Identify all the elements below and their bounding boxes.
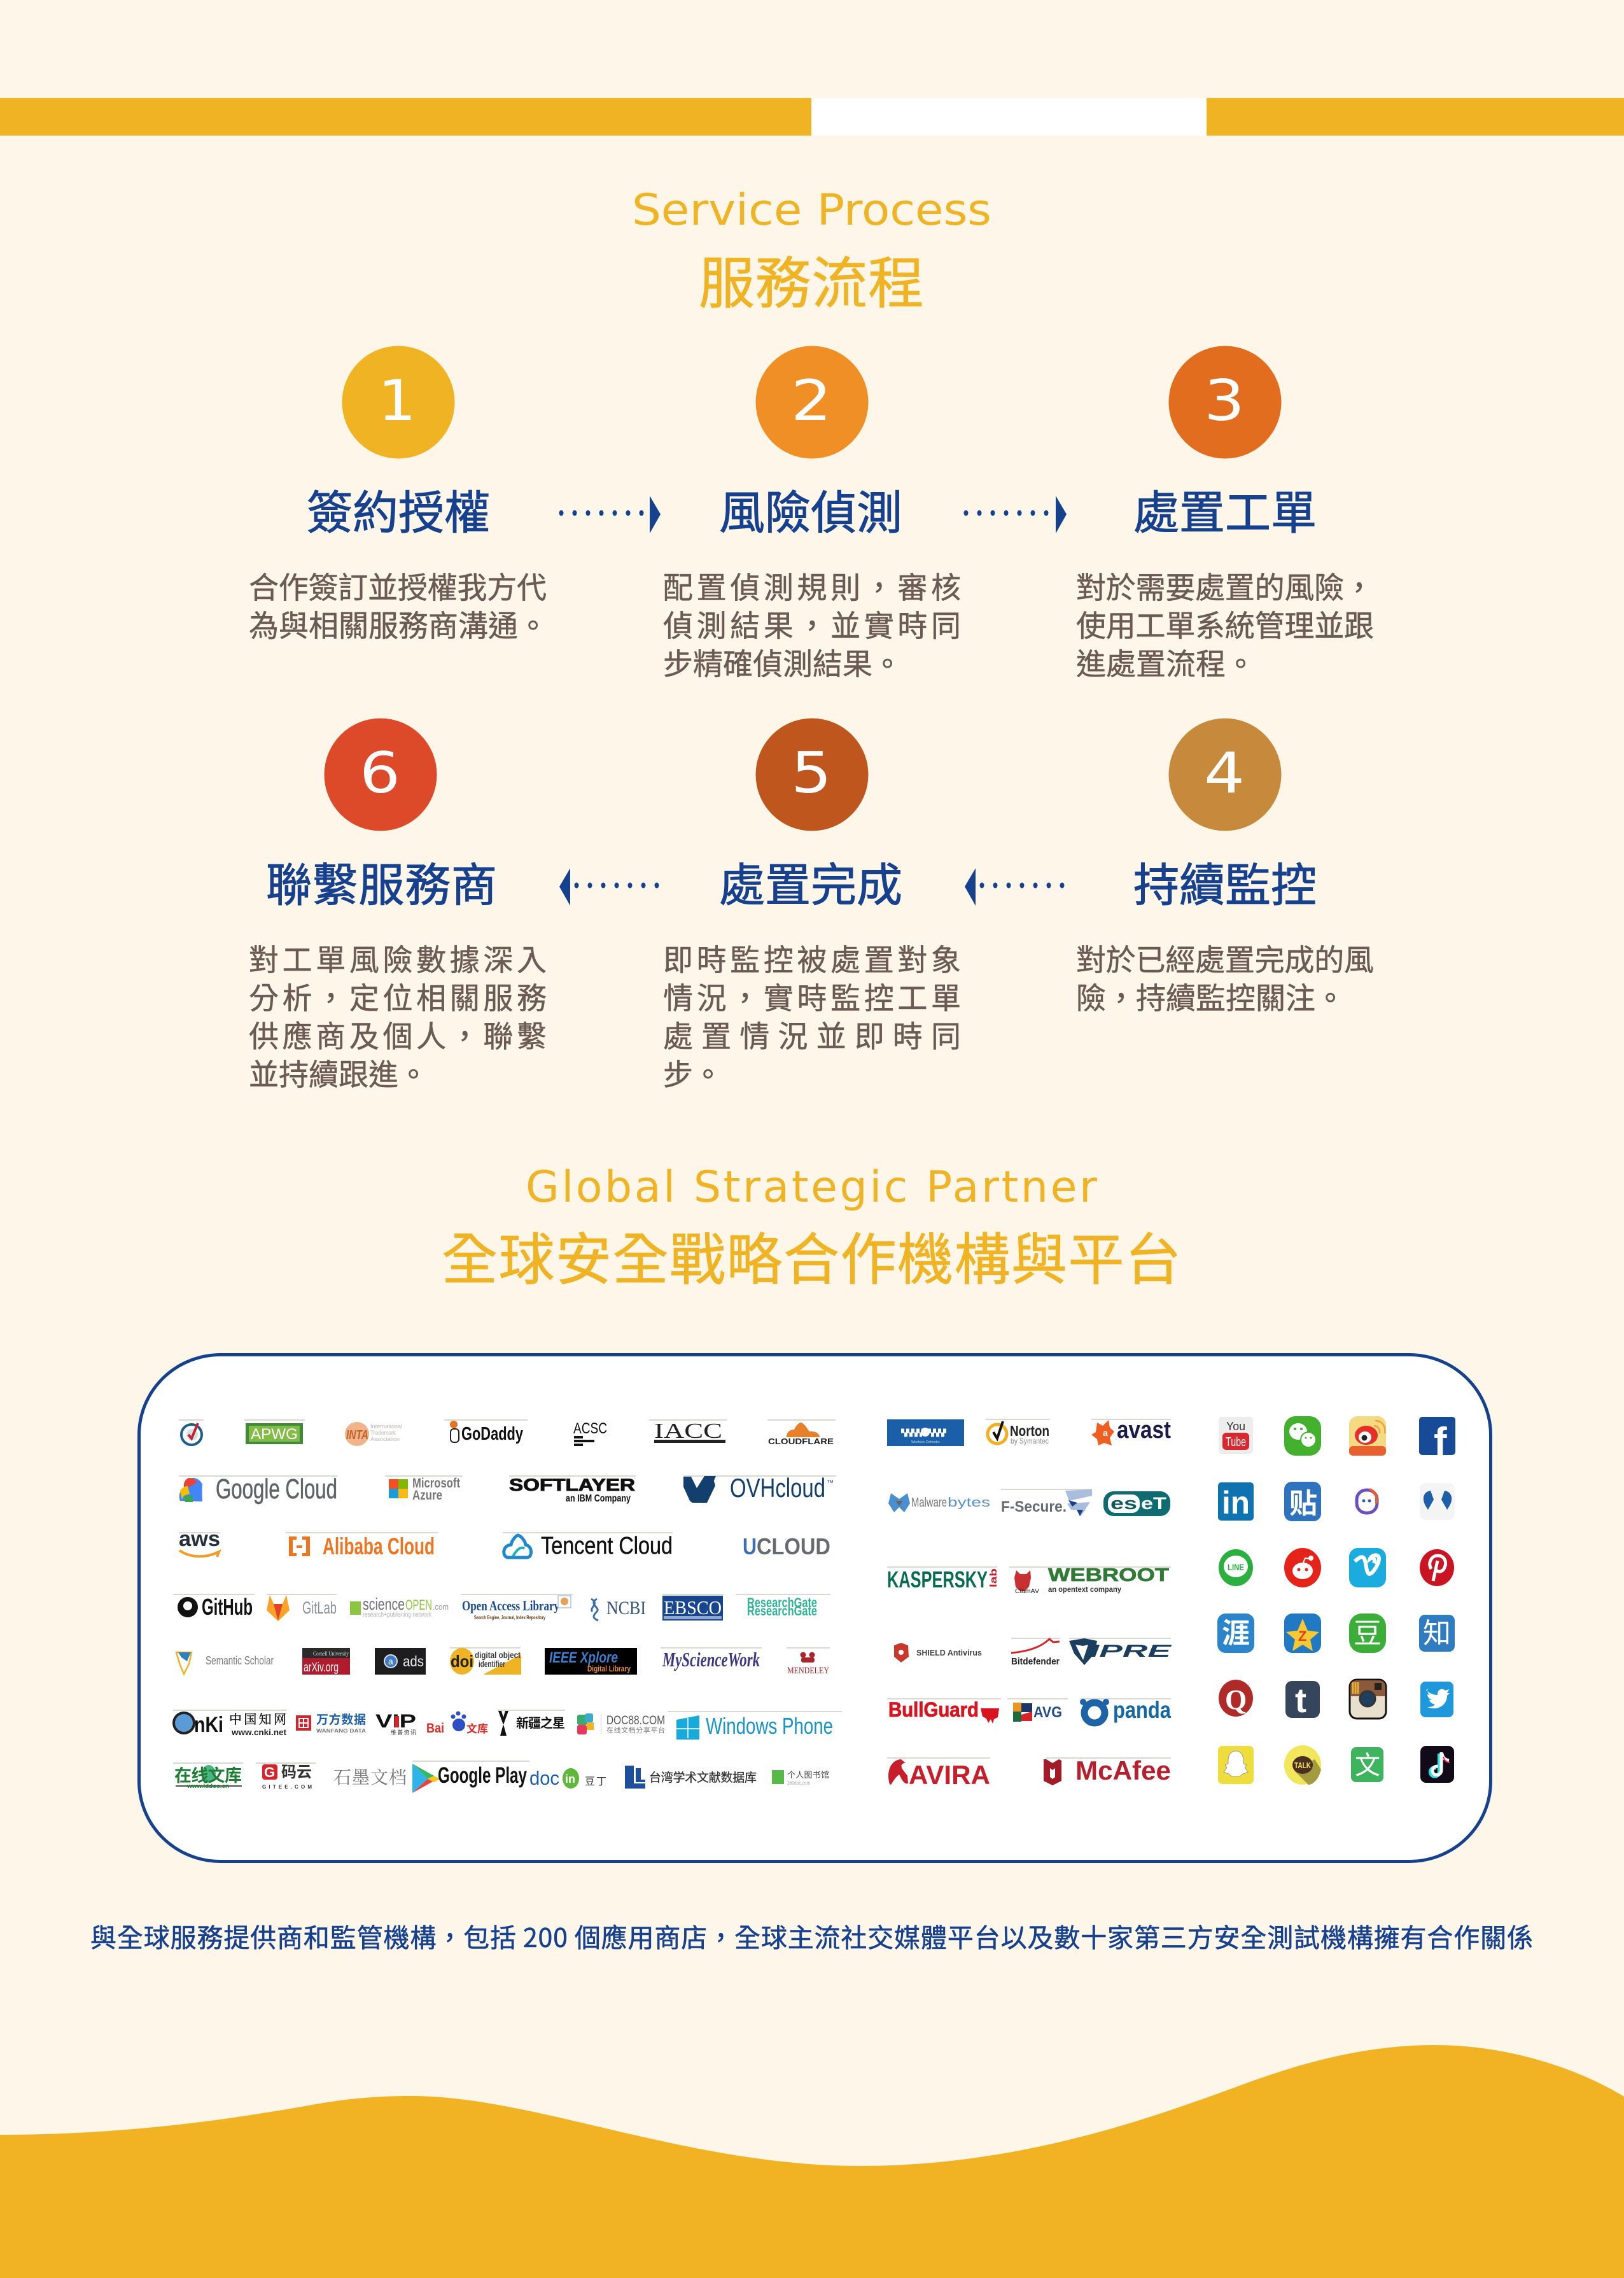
- step 4: 險，持續監控關注。: [1076, 974, 1345, 1018]
- logo: 在线文库: www.lddoc.cn: [186, 1783, 229, 1789]
- logo: IEEE Xplore: IEEE Xplore: [549, 1649, 618, 1666]
- icon: YouTube: Tube: [1226, 1435, 1246, 1449]
- logo: IEEE Xplore: [545, 1648, 637, 1675]
- logo: ClamAV and Webroot: WEBROOT: [1048, 1565, 1169, 1585]
- logo: Gitee 码云: [262, 1759, 312, 1790]
- icon: Quora: Q: [1225, 1684, 1247, 1715]
- top colour bar: [0, 98, 1624, 136]
- logo: CNKI: nKi: [194, 1713, 223, 1737]
- step 1: [249, 346, 548, 645]
- logo: Cloudflare: CLOUDFLARE: [768, 1437, 834, 1446]
- logo: ClamAV and Webroot: [1014, 1565, 1169, 1595]
- icon: TikTok: [1420, 1746, 1454, 1783]
- step 1: 合作簽訂並授權我方代: [249, 563, 547, 607]
- logo: Kaspersky: lab: [988, 1568, 999, 1587]
- logo: scienceOpen: .com: [433, 1602, 449, 1612]
- step 6: 並持續跟進。: [249, 1050, 428, 1094]
- arrow: step 4 to 5: [965, 868, 1064, 906]
- icon: KakaoTalk: TALK: [1294, 1761, 1311, 1770]
- logo: ADS: [375, 1648, 426, 1675]
- logo: Kaspersky: KASPERSKY: [887, 1566, 988, 1592]
- icon: KakaoTalk: [1284, 1745, 1321, 1785]
- step 2: 步精確偵測結果。: [663, 640, 902, 684]
- logo: Norton: Norton: [1010, 1423, 1049, 1439]
- logo: 石墨文档: 石墨文档: [333, 1768, 407, 1788]
- icon: Quora: [1219, 1680, 1253, 1717]
- footer text: 與全球服務提供商和監管機構，包括 200 個應用商店，全球主流社交媒體平台以及數十家第三方安全測試機構擁有合作關係: [90, 1916, 1533, 1955]
- logo: GitLab: [267, 1595, 337, 1621]
- logo: ICANN: [181, 1423, 202, 1445]
- logo: 新疆之星: 新疆之星: [516, 1713, 565, 1731]
- heading: Global Strategic Partner: 全球安全戰略合作機構與平台: [442, 1215, 1181, 1296]
- logo: VIPRE: [1069, 1638, 1173, 1665]
- logo: Google Cloud: [179, 1473, 337, 1505]
- icon: 豆瓣: 豆: [1354, 1610, 1382, 1651]
- logo: SHIELD Antivirus: SHIELD Antivirus: [916, 1648, 982, 1657]
- logo: avast: avast: [1117, 1417, 1171, 1444]
- logo: Gitee 码云: GITEE.COM: [262, 1784, 312, 1790]
- icon: Tumblr: t: [1295, 1682, 1306, 1720]
- logo: ClamAV and Webroot: an opentext company: [1048, 1585, 1121, 1594]
- logo: Baidu Wenku: [426, 1711, 488, 1736]
- logo: NCBI: [591, 1598, 646, 1621]
- logo: SoftLayer: [509, 1475, 635, 1504]
- step 6: 分析，定位相關服務: [249, 974, 547, 1018]
- step 5: 即時監控被處置對象: [663, 936, 961, 980]
- logo: CNKI: www.cnki.net: [231, 1727, 287, 1737]
- logo: SoftLayer: SOFTLAYER: [509, 1475, 635, 1494]
- heading: Service Process: 服務流程: [699, 239, 924, 320]
- step 5: 處置情況並即時同: [663, 1012, 961, 1056]
- icon: Instagram: [1350, 1680, 1386, 1719]
- logo: OVHcloud: OVHcloud: [730, 1473, 825, 1503]
- heading: Global Strategic Partner: Global Strategic Partner: [526, 1162, 1097, 1213]
- step 4: 4: [1204, 740, 1245, 806]
- logo: UCloud: CLOUD: [757, 1533, 830, 1559]
- logo: Google Cloud: Google Cloud: [216, 1473, 337, 1505]
- logo: Mendeley: [787, 1652, 829, 1676]
- logo: DOC88: DOC88.COM: [606, 1714, 665, 1727]
- logo: panda: panda: [1113, 1697, 1171, 1723]
- logo: Open Access Library: [462, 1596, 571, 1621]
- logo: VIP: [375, 1711, 416, 1736]
- step 3: 對於需要處置的風險，: [1076, 563, 1374, 607]
- logo: Wanfang Data: [296, 1710, 366, 1734]
- icon: 知乎: 知: [1423, 1610, 1451, 1651]
- logo: SoftLayer: an IBM Company: [566, 1493, 631, 1504]
- logo: ACSC: ACSC: [573, 1420, 607, 1437]
- logo: McAfee: McAfee: [1075, 1755, 1171, 1785]
- icon: Reddit: [1284, 1548, 1321, 1587]
- logo: VIP: 维普资讯: [391, 1728, 416, 1736]
- step 3: 使用工單系統管理並跟: [1076, 601, 1374, 645]
- logo: avast: [1091, 1417, 1171, 1445]
- logo: Gitee 码云: 码云: [281, 1759, 312, 1782]
- step 1: 為與相關服務商溝通。: [249, 601, 548, 645]
- logo: scienceOpen: science: [363, 1594, 405, 1614]
- logo: 台湾学术文献数据库: 台湾学术文献数据库: [649, 1768, 757, 1785]
- logo: APWG: [246, 1423, 303, 1444]
- logo: Tencent Cloud: Tencent Cloud: [541, 1533, 673, 1559]
- logo: Tencent Cloud: [504, 1533, 673, 1559]
- logo: ESET: eT: [1141, 1494, 1167, 1513]
- step 6: 6: [360, 740, 400, 806]
- logo: doc.in 豆丁: [529, 1767, 606, 1789]
- logo: DOI: digital object: [475, 1650, 521, 1660]
- icon: blue symbol app: [1420, 1483, 1455, 1520]
- logo: CNKI: 中国知网: [229, 1712, 286, 1727]
- logo: GitHub: GitHub: [202, 1594, 253, 1620]
- heading: Service Process: Service Process: [632, 185, 991, 236]
- logo: 新疆之星: [498, 1711, 565, 1736]
- logo: BullGuard: BullGuard: [888, 1698, 979, 1721]
- logo: VIPRE: IPRE: [1089, 1641, 1173, 1661]
- logo: DOI: doi: [451, 1652, 473, 1671]
- logo: CNKI: [174, 1712, 287, 1737]
- icon: Tumblr: [1285, 1681, 1320, 1720]
- logo: ClamAV and Webroot: ClamAV: [1015, 1588, 1039, 1595]
- icon: Twitter: [1420, 1682, 1453, 1717]
- logo: doc.in 豆丁: doc: [529, 1767, 559, 1789]
- arrow: step 1 to 2: [559, 496, 661, 533]
- logo: INTA: International: [370, 1423, 402, 1430]
- icon: LINE: LINE: [1228, 1562, 1244, 1572]
- icon: Facebook: f: [1434, 1420, 1447, 1464]
- logo: IACC: IACC: [654, 1419, 722, 1443]
- logo: Semantic Scholar: Semantic Scholar: [206, 1654, 274, 1667]
- step 6: 對工單風險數據深入: [249, 936, 547, 980]
- step 3: 3: [1204, 368, 1245, 433]
- logo: F-Secure: F-Secure.: [1001, 1498, 1067, 1515]
- icon: star Z: Z: [1298, 1628, 1306, 1644]
- step 6: [249, 718, 547, 1094]
- logo: Wanfang Data: 万方数据: [316, 1710, 366, 1727]
- icon: YouTube: [1219, 1417, 1253, 1454]
- arrow: step 5 to 6: [559, 868, 659, 906]
- logo: AVG: AVG: [1033, 1704, 1062, 1721]
- logo: INTA: [345, 1422, 402, 1446]
- logo: arXiv: [302, 1648, 350, 1675]
- logo: Microsoft Azure: Azure: [412, 1488, 442, 1503]
- step 5: 步。: [663, 1050, 723, 1094]
- step 4: 持續監控: [1133, 848, 1317, 915]
- logo: ResearchGate: ResearchGate: [747, 1596, 817, 1610]
- step 6: 聯繫服務商: [266, 848, 497, 915]
- heading: Global Strategic Partner: [442, 1162, 1181, 1296]
- logo: DOC88: [577, 1713, 665, 1735]
- icon: Pinterest: [1420, 1549, 1454, 1586]
- logo: EBSCO: EBSCO: [664, 1596, 722, 1619]
- step 1: 簽約授權: [307, 475, 490, 542]
- icon: chat bubble: [1357, 1489, 1377, 1513]
- logo: DOC88: 在线文档分享平台: [606, 1725, 665, 1735]
- logo: APWG: APWG: [251, 1426, 298, 1443]
- footer wave: [0, 2045, 1624, 2278]
- logo: GoDaddy: GoDaddy: [461, 1424, 523, 1444]
- logo: 台湾学术文献数据库: [625, 1766, 757, 1789]
- logo: Wanfang Data: WANFANG DATA: [316, 1728, 366, 1734]
- logo: ResearchGate: ResearchGate: [747, 1604, 817, 1619]
- icon: star Z: [1284, 1614, 1321, 1653]
- icon: LINE: [1219, 1549, 1253, 1586]
- logo: GitLab: GitLab: [302, 1598, 337, 1617]
- logo: Microsoft Azure: Microsoft: [412, 1476, 460, 1491]
- logo: Windows Defender: Windows Defender: [911, 1440, 940, 1444]
- panel: partner logos: [139, 1354, 1490, 1861]
- logo: INTA: INTA: [346, 1428, 368, 1442]
- step 1: 1: [378, 368, 416, 433]
- logo: doc.in 豆丁: 豆丁: [585, 1773, 606, 1788]
- logo: ACSC: [573, 1420, 607, 1446]
- icon: 贴吧: 贴: [1289, 1480, 1317, 1521]
- logo: Microsoft Azure: [389, 1476, 460, 1503]
- icon: 百度翻译: 文: [1355, 1745, 1380, 1782]
- logo: aws: aws: [179, 1527, 220, 1551]
- logo: 在线文库: 在线文库: [174, 1762, 242, 1787]
- logo: arXiv: arXiv.org: [304, 1661, 339, 1675]
- logo: VIP: VIP: [375, 1711, 416, 1732]
- step 6: 供應商及個人，聯繫: [249, 1012, 547, 1056]
- logo: Gitee 码云: G: [264, 1764, 275, 1780]
- logo: Bitdefender: [1011, 1639, 1060, 1667]
- step 2: 偵測結果，並實時同: [663, 601, 961, 645]
- step 2: 2: [791, 368, 832, 433]
- icon: Snapchat: [1218, 1746, 1254, 1784]
- step 3: 處置工單: [1133, 475, 1317, 542]
- logo: Windows Phone: [676, 1713, 833, 1740]
- logo: GoDaddy: [450, 1421, 523, 1444]
- logo: scienceOpen: research+publishing network: [363, 1611, 431, 1619]
- logo: DOI: identifier: [479, 1659, 505, 1669]
- step 5: [663, 718, 961, 1094]
- step 5: 5: [791, 740, 832, 806]
- logo: Baidu Wenku: Bai: [426, 1721, 444, 1736]
- logo: Alibaba Cloud: Alibaba Cloud: [323, 1533, 435, 1559]
- step 2: [663, 346, 961, 684]
- logo: Google Play: Google Play: [438, 1763, 527, 1788]
- logo: INTA: Trademark: [370, 1430, 396, 1436]
- heading: Service Process: [632, 185, 991, 320]
- logo: Semantic Scholar: [176, 1652, 274, 1674]
- logo: Norton: by Symantec: [1011, 1437, 1049, 1445]
- logo: MyScienceWork: MyScienceWork: [662, 1648, 760, 1671]
- step 3: 進處置流程。: [1076, 640, 1256, 684]
- icon: 涯: 涯: [1222, 1610, 1250, 1651]
- logo: 个人图书馆 360doc: 360doc.com: [787, 1780, 810, 1786]
- logo: SHIELD Antivirus: [894, 1643, 982, 1663]
- logo: Cloudflare: [768, 1423, 834, 1446]
- logo: INTA: Association: [370, 1436, 400, 1442]
- logo: Open Access Library: Search Engine, Journal, Index Repository: [474, 1615, 545, 1621]
- logo: doc.in 豆丁: in: [565, 1773, 575, 1785]
- logo: NCBI: NCBI: [606, 1598, 646, 1619]
- logo: ADS: ads: [403, 1653, 424, 1670]
- logo: F-Secure: [1001, 1489, 1092, 1516]
- logo: Avira: AVIRA: [909, 1760, 990, 1790]
- icon: Weibo: [1349, 1416, 1386, 1456]
- icon: LinkedIn: in: [1222, 1485, 1250, 1521]
- logo: Windows Phone: Windows Phone: [706, 1713, 833, 1739]
- logo: Google Play: [412, 1763, 527, 1793]
- step 5: 情況，實時監控工單: [663, 974, 961, 1018]
- logo: Open Access Library: Open Access Library: [462, 1598, 559, 1614]
- step 4: [1076, 718, 1374, 1018]
- logo: arXiv: Cornell University: [313, 1650, 349, 1657]
- logo: panda: [1080, 1697, 1171, 1723]
- logo: Bitdefender: Bitdefender: [1011, 1656, 1060, 1667]
- icon: WeChat: [1284, 1416, 1321, 1456]
- logo: Baidu Wenku: 文库: [466, 1720, 488, 1736]
- logo: Malwarebytes: [888, 1493, 990, 1512]
- logo: ADS: a: [388, 1656, 393, 1666]
- logo: UCloud: U: [743, 1533, 757, 1559]
- step 3: [1076, 346, 1374, 684]
- logo: Windows Defender: [887, 1419, 964, 1446]
- logo: avast: a: [1103, 1428, 1108, 1438]
- step 4: 對於已經處置完成的風: [1076, 936, 1374, 980]
- logo: GitHub: [178, 1594, 253, 1620]
- step 2: 配置偵測規則，審核: [663, 563, 961, 607]
- logo: OVHcloud: [683, 1473, 834, 1503]
- logo: 个人图书馆 360doc: 个人图书馆: [787, 1768, 829, 1780]
- logo: scienceOpen: [350, 1594, 449, 1619]
- logo: Norton: [988, 1421, 1049, 1445]
- step 2: 風險偵測: [719, 475, 902, 542]
- logo: Malwarebytes: Malware: [911, 1496, 947, 1510]
- logo: DOI: [450, 1648, 521, 1675]
- icon: YouTube: You: [1226, 1420, 1245, 1433]
- logo: ESET: es: [1110, 1494, 1137, 1513]
- logo: Alibaba Cloud: [289, 1533, 435, 1559]
- logo: Mendeley: MENDELEY: [787, 1666, 829, 1676]
- icon: Facebook: [1419, 1417, 1455, 1464]
- logo: AVG: [1013, 1703, 1062, 1722]
- logo: 个人图书馆 360doc: [772, 1768, 829, 1786]
- arrow: step 2 to 3: [963, 496, 1067, 533]
- logo: IEEE Xplore: Digital Library: [587, 1664, 631, 1673]
- logo: ESET: [1103, 1491, 1170, 1516]
- logo: Malwarebytes: bytes: [948, 1496, 990, 1510]
- step 5: 處置完成: [719, 848, 902, 915]
- logo: OVHcloud: ™: [827, 1479, 834, 1487]
- logo: scienceOpen: OPEN: [405, 1597, 432, 1613]
- icon: Vimeo: [1349, 1548, 1386, 1587]
- logo: ResearchGate: [747, 1596, 817, 1619]
